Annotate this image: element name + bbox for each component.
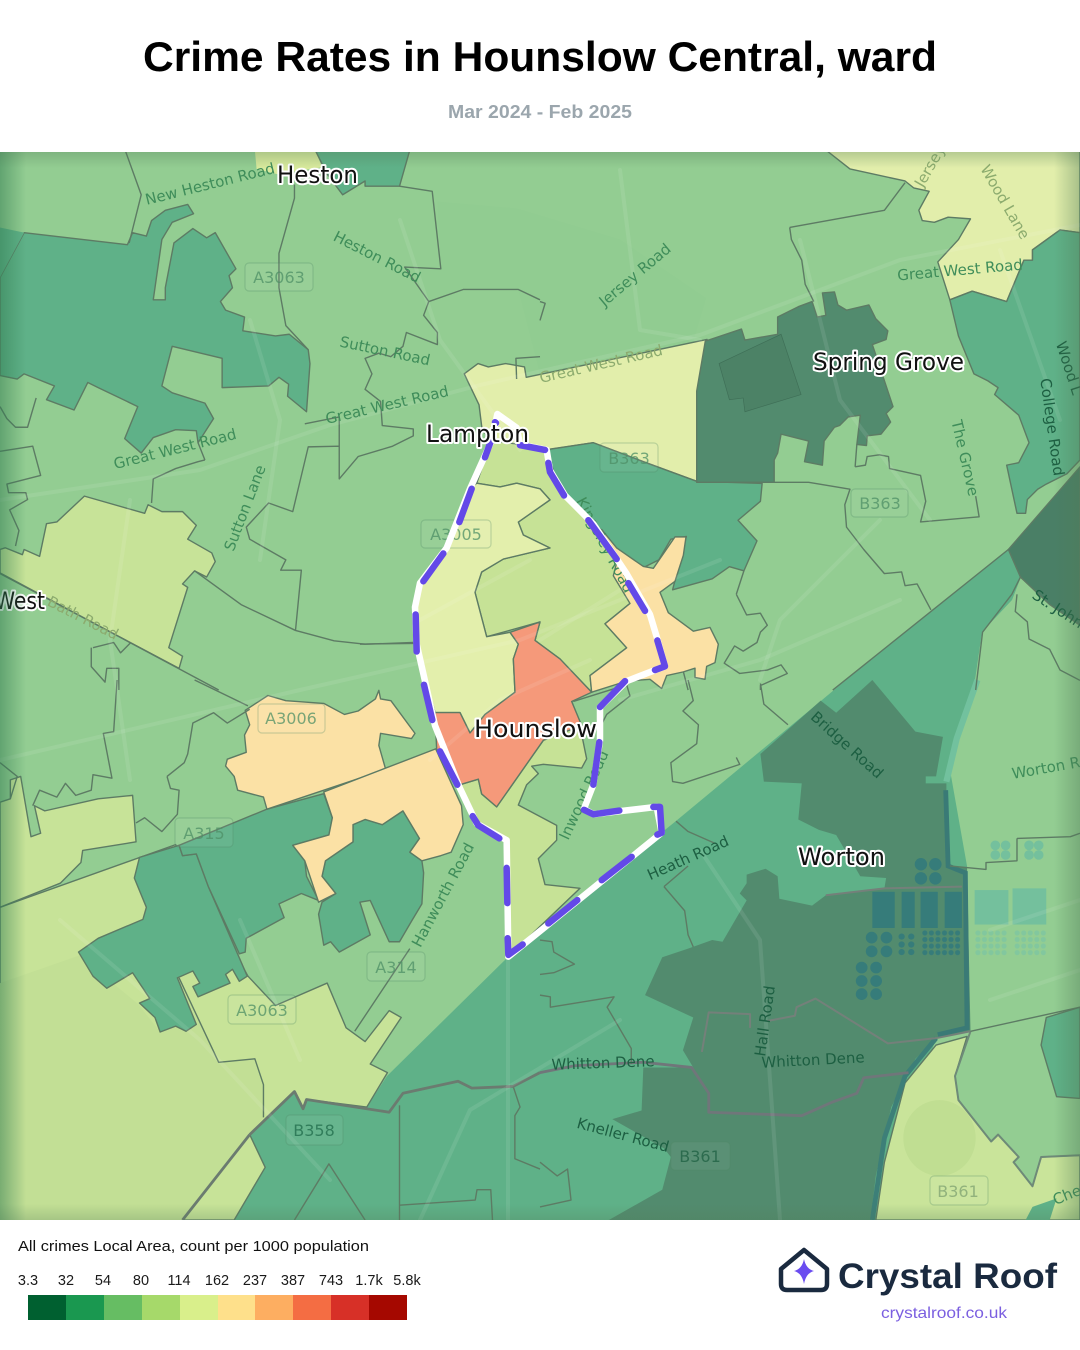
legend tick labels: 80 (133, 1273, 149, 1289)
central ward zones (360, 441, 718, 957)
legend tick labels: 114 (167, 1273, 191, 1289)
road labels: Sutton Road (338, 333, 432, 369)
road labels: Inwood Road (555, 747, 613, 843)
road number shields: A3005 (430, 525, 482, 544)
place labels (0, 161, 964, 871)
road number shields: B361 (937, 1182, 979, 1201)
legend title: All crimes Local Area, count per 1000 population (18, 1239, 369, 1255)
road labels: Kingsley Road (572, 494, 638, 596)
legend tick labels: 32 (58, 1273, 74, 1289)
road labels: Heath Road (644, 832, 732, 884)
road labels (44, 142, 1080, 1209)
road labels: Great West Road (538, 341, 664, 387)
road labels: College Road (1036, 377, 1068, 477)
road labels: Sutton Lane (220, 463, 270, 553)
place labels: Heston (277, 161, 358, 189)
street network (0, 170, 1080, 1220)
road labels: New Heston Road (143, 159, 277, 209)
legend tick labels: 237 (243, 1273, 267, 1289)
ward boundary: Hounslow Central (415, 414, 665, 957)
place labels: Hounslow (474, 715, 597, 743)
legend tick labels: 162 (205, 1273, 229, 1289)
legend tick labels: 3.3 (18, 1273, 38, 1289)
place labels: Lampton (426, 420, 529, 448)
map edge vignette (0, 152, 1080, 1220)
road labels: Hanworth Road (408, 840, 478, 950)
road labels: Bridge Road (807, 708, 887, 782)
legend tick labels: 743 (319, 1273, 343, 1289)
icon: house with star (781, 1250, 827, 1290)
road labels: Great West Road (324, 382, 450, 428)
road labels: The Grove (947, 417, 982, 498)
road labels: Jersey Road (595, 240, 675, 311)
legend (18, 1239, 421, 1320)
road labels: Hall Road (751, 984, 779, 1058)
website url: crystalroof.co.uk (881, 1305, 1008, 1322)
legend tick labels: 54 (95, 1273, 111, 1289)
road labels: Kneller Road (575, 1114, 671, 1156)
road number shields: A3063 (253, 268, 305, 287)
road number shields: A3063 (236, 1001, 288, 1020)
road labels: Whitton Dene (551, 1052, 655, 1074)
place labels: Worton (798, 843, 885, 871)
road number shields: A315 (183, 824, 225, 843)
road labels: Great West Road (112, 425, 238, 473)
road labels: Heston Road (330, 227, 424, 287)
legend tick labels: 1.7k (355, 1273, 383, 1289)
logo: Crystal Roof (781, 1250, 1057, 1322)
choropleth map (0, 142, 1080, 1220)
road number shields: A314 (375, 958, 417, 977)
road number shields: B361 (679, 1147, 721, 1166)
road labels: Jersey (910, 142, 949, 191)
road labels: Great West Road (897, 256, 1023, 284)
legend colour scale (28, 1295, 407, 1320)
road labels: Bath Road (44, 592, 122, 644)
road number shields: B358 (293, 1121, 335, 1140)
place labels: Spring Grove (813, 348, 964, 376)
road labels: Whitton Dene (761, 1048, 865, 1072)
road number shields: B363 (859, 494, 901, 513)
legend tick labels (18, 1273, 421, 1289)
legend tick labels: 387 (281, 1273, 305, 1289)
wordmark: Crystal Roof (838, 1257, 1057, 1296)
road number shields: B363 (608, 449, 650, 468)
title: Crime Rates in Hounslow Central, ward (143, 33, 937, 80)
road labels: Wood Lane (976, 162, 1034, 242)
road number shields: A3006 (265, 709, 317, 728)
subtitle: date range: Mar 2024 - Feb 2025 (448, 101, 632, 122)
road labels: Worton R (1010, 753, 1080, 783)
road number shields (175, 263, 988, 1205)
south mid-green zone (234, 549, 1021, 1220)
legend tick labels: 5.8k (393, 1273, 421, 1289)
